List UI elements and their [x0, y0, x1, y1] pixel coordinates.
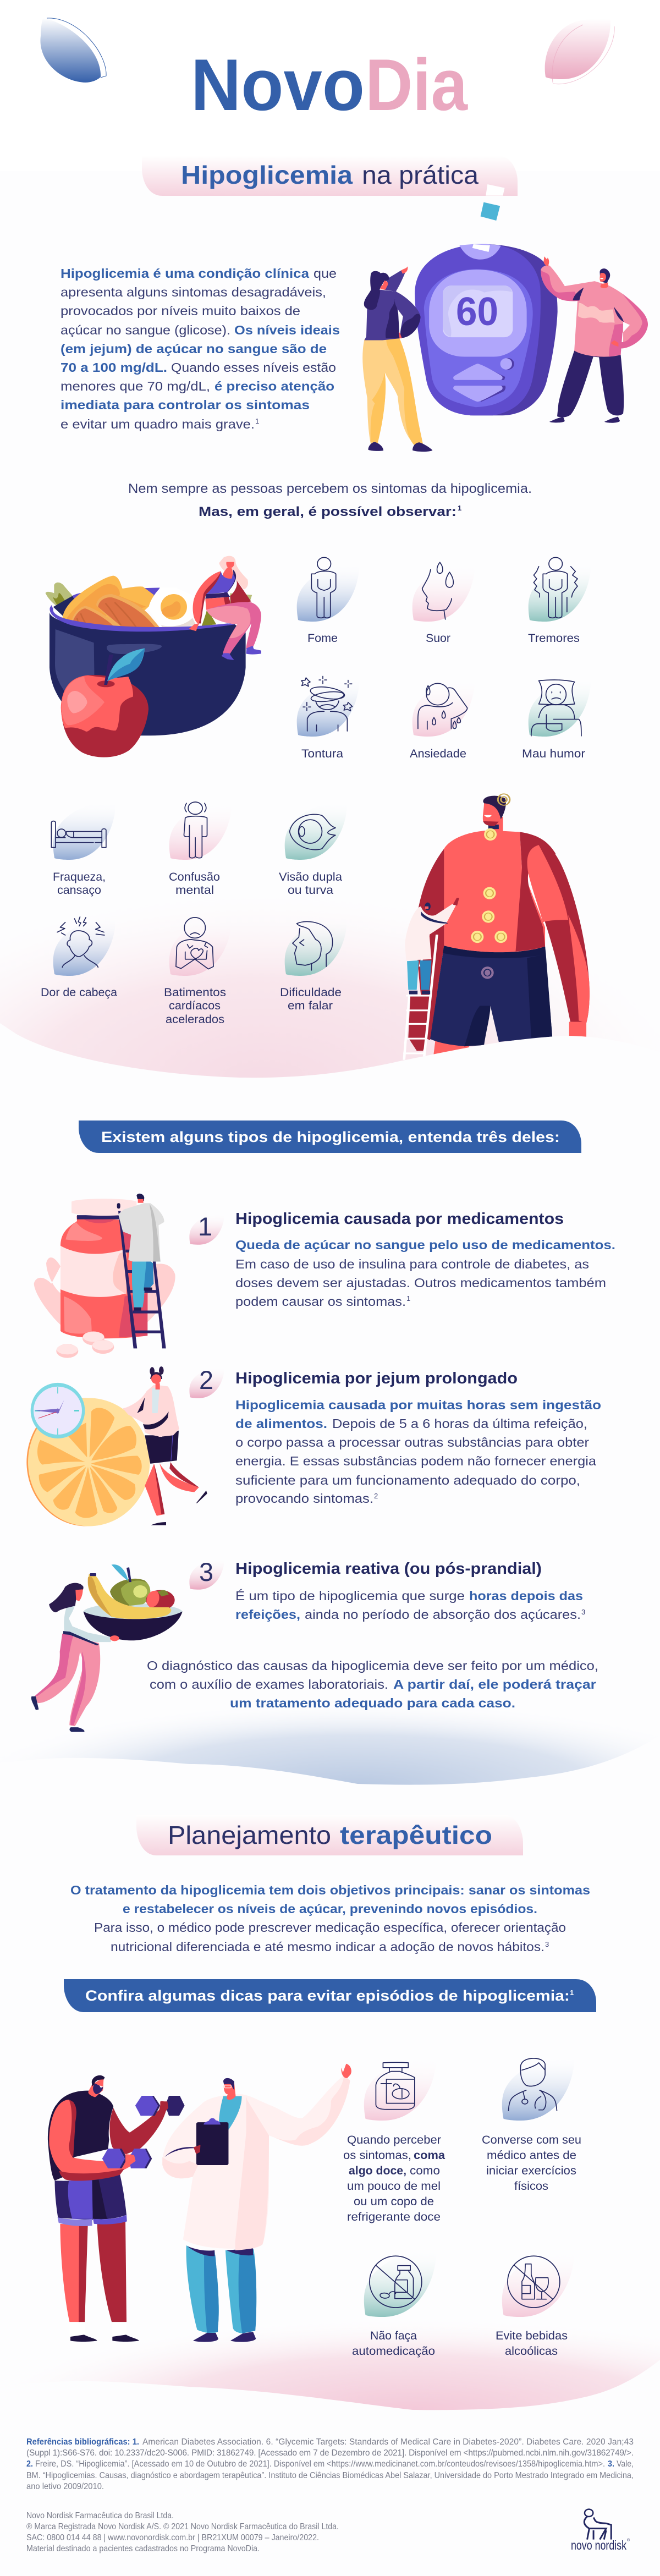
number badge 2: 2: [199, 1365, 213, 1394]
references: BM. “Hipoglicemias. Causas, diagnóstico e abordagem terapêutica”. Instituto de Ciências Biomédicas Abel Salazar, Universidade do Porto Mestrado Integrado em Medicina,: [26, 2471, 634, 2480]
symptom: Tremores: [528, 557, 591, 645]
tip: converse com seu médico: iniciar exercícios: [486, 2165, 576, 2177]
man: [541, 256, 648, 423]
section banner: tipos de hipoglicemia: [79, 1121, 581, 1153]
diagnosis note: O diagnóstico das causas da hipoglicemia deve ser feito por um médico,: [147, 1658, 598, 1673]
references: (Suppl 1):S66-S76. doi: 10.2337/dc20-S006. PMID: 31862749. [Acessado em 7 de Dezembro de 2021]. Disponível em <https://pubmed.ncbi.nlm.nih.gov/31862749/>.: [26, 2448, 634, 2458]
symptom: Batimentos cardíacos acelerados: Batimentos: [164, 986, 226, 999]
symptom: Dificuldade em falar: Dificuldade: [280, 986, 342, 999]
intro paragraph: açúcar no sangue (glicose).: [61, 323, 230, 337]
cause 2: jejum prolongado: o corpo passa a processar outras substâncias para obter: [235, 1435, 589, 1449]
treatment text: O tratamento da hipoglicemia tem dois objetivos principais: sanar os sintomas: [70, 1883, 590, 1897]
trainer torso and arms: [48, 2091, 168, 2181]
legal footer: Novo Nordisk Farmacêutica do Brasil Ltda.: [26, 2511, 174, 2520]
symptom: Fome: Fome: [307, 632, 338, 645]
symptom: Fraqueza, cansaço: Fraqueza,: [53, 871, 106, 883]
cause 3: reativa: [235, 1560, 585, 1622]
heading banner: Planejamento terapêutico: terapêutico: [340, 1821, 492, 1849]
legal footer: ® Marca Registrada Novo Nordisk A/S. © 2021 Novo Nordisk Farmacêutica do Brasil Ltda.: [26, 2522, 339, 2531]
illustration: food bowl, apple and woman: [46, 556, 261, 757]
cause 1: medicamentos: 1: [406, 1294, 410, 1303]
panel: symptom icon row 2: [297, 676, 591, 760]
ladder: [403, 935, 438, 1060]
cause 2: jejum prolongado: energia. E essas substâncias podem não fornecer energia: [235, 1454, 597, 1468]
treatment text: Para isso, o médico pode prescrever medicação específica, oferecer orientação: [94, 1920, 566, 1935]
head: [483, 796, 506, 832]
logo: Novo Nordisk: novo nordisk: [571, 2538, 626, 2552]
shorts: [430, 946, 552, 1046]
meter body: [415, 244, 558, 415]
treatment text: 3: [545, 1940, 549, 1948]
section banner: dicas: [64, 1979, 596, 2012]
greens: [46, 583, 252, 626]
references: American Diabetes Association. 6. “Glycemic Targets: Standards of Medical Care in Diabetes-2020”. Diabetes Care. 2020 Jan;43: [142, 2437, 634, 2447]
symptom: Ansiedade: Ansiedade: [410, 748, 466, 760]
symptom: Tremores: Tremores: [528, 632, 580, 645]
intro paragraph: Hipoglicemia é uma condição clínica: [61, 266, 310, 281]
doctor head and hand: [223, 2064, 351, 2100]
references: [26, 2437, 634, 2491]
intro paragraph: Quando esses níveis estão: [171, 360, 336, 375]
cause 1: medicamentos: [235, 1210, 615, 1309]
references: 3.: [608, 2459, 614, 2469]
diagnosis note: um tratamento adequado para cada caso.: [230, 1696, 515, 1710]
cause 1: medicamentos: doses devem ser ajustadas. Outros medicamentos também: [235, 1276, 606, 1290]
intro paragraph: é preciso atenção: [215, 379, 334, 393]
heading banner: Planejamento terapêutico: [136, 1815, 523, 1855]
intro paragraph: 1: [255, 417, 259, 425]
apple: [61, 648, 148, 757]
references: Vale,: [617, 2459, 634, 2469]
clipboard: [164, 2118, 228, 2165]
symptoms intro text: Mas, em geral, é possível observar:: [199, 504, 457, 519]
background wave: pink bottom: [0, 2319, 660, 2410]
symptom: Mau humor: [522, 678, 591, 760]
symptom: Mau humor: Mau humor: [522, 748, 585, 760]
illustration: glucose meter with two people: [362, 184, 648, 452]
doctor: [117, 1194, 164, 1310]
diagnosis note: A partir daí, ele poderá traçar: [393, 1677, 596, 1691]
orange slice: [26, 1398, 150, 1526]
intro paragraph: (em jejum) de açúcar no sangue são de: [61, 342, 327, 356]
illustration: orange slice, clock and woman: [26, 1366, 207, 1526]
dumbbell lower: [102, 2149, 152, 2168]
right arm: [527, 841, 590, 1039]
intro paragraph: e evitar um quadro mais grave.: [61, 417, 255, 431]
symptom: Tontura: Tontura: [301, 748, 343, 760]
references: ano letivo 2009/2010.: [26, 2482, 104, 2491]
test strip: [481, 184, 504, 221]
symptom: Batimentos cardíacos acelerados: [164, 917, 232, 1026]
seated woman: [189, 556, 261, 660]
section banner: tipos de hipoglicemia: Existem alguns tipos de hipoglicemia, entenda três deles:: [101, 1129, 560, 1145]
cause 2: jejum prolongado: [235, 1370, 601, 1506]
tip: coma algo doce: um pouco de mel: [347, 2180, 441, 2193]
symptom: Suor: [413, 562, 475, 645]
symptom: Dificuldade em falar: em falar: [288, 999, 333, 1012]
treatment text: nutricional diferenciada e até mesmo indicar a adoção de novos hábitos.: [111, 1940, 544, 1954]
cause 3: reativa: ainda no período de absorção dos açúcares.: [305, 1607, 581, 1622]
meter reading: 60: [456, 290, 498, 334]
tip: coma algo doce: os sintomas,: [343, 2149, 411, 2162]
section banner: dicas: 1: [570, 1989, 574, 1997]
tip: evite bebidas alcoólicas: Evite bebidas: [496, 2330, 568, 2342]
illustration: medicine bottle with doctor on ladder: [34, 1194, 175, 1358]
references: 2.: [26, 2459, 33, 2469]
doctor pants: [186, 2245, 256, 2342]
symptom: Batimentos cardíacos acelerados: cardíacos: [169, 999, 221, 1012]
tip: coma algo doce: algo doce,: [349, 2165, 406, 2177]
panel: symptom icon row 1: [297, 557, 591, 645]
tip: evite bebidas alcoólicas: alcoólicas: [505, 2345, 558, 2358]
tip: não faça automedicação: [352, 2249, 436, 2358]
clock: [31, 1383, 85, 1438]
tip: coma algo doce: como: [410, 2165, 440, 2177]
background wave: blue: [0, 1700, 660, 1785]
number badge 1: 1: [198, 1212, 212, 1241]
symptoms intro text: 1: [458, 504, 461, 512]
illustration: trainer with dumbbells and doctor: [48, 2064, 351, 2342]
tip: coma algo doce: refrigerante doce: [347, 2211, 441, 2223]
left arm and legs: [408, 849, 469, 1055]
treatment text: e restabelecer os níveis de açúcar, prevenindo novos episódios.: [123, 1902, 537, 1916]
references: Freire, DS. “Hipoglicemia”. [Acessado em 10 de Outubro de 2021]. Disponível em <https://www.medicinanet.com.br/conteudos/revisoes/1358/hipoglicemia.htm>.: [35, 2459, 605, 2469]
ladder: [118, 1211, 166, 1348]
illustration: woman carrying bowl of fruit: [31, 1564, 183, 1732]
background wave: pink: [0, 891, 660, 1078]
symptom: Batimentos cardíacos acelerados: acelerados: [166, 1013, 224, 1026]
logo: Novo Nordisk: ®: [627, 2538, 630, 2542]
symptom: Fraqueza, cansaço: cansaço: [57, 884, 101, 897]
tip: converse com seu médico: físicos: [514, 2180, 548, 2193]
section banner: dicas: Confira algumas dicas para evitar episódios de hipoglicemia:: [85, 1987, 570, 2004]
cause 2: jejum prolongado: de alimentos.: [235, 1416, 327, 1431]
tip: não faça automedicação: automedicação: [352, 2345, 435, 2358]
legal footer: Material destinado a pacientes cadastrados no Programa NovoDia.: [26, 2544, 260, 2553]
title: NovoDia logo: Novo: [191, 45, 365, 126]
cause 3: reativa: refeições,: [235, 1607, 300, 1622]
number badge 2: [189, 1365, 224, 1398]
decorative leaf: top right: [545, 19, 614, 84]
symptom: Visão dupla ou turva: ou turva: [288, 884, 333, 897]
cause 2: jejum prolongado: Hipoglicemia causada por muitas horas sem ingestão: [235, 1398, 601, 1412]
torso and head: [49, 1583, 119, 1645]
cause 2: jejum prolongado: Hipoglicemia por jejum prolongado: [235, 1370, 518, 1387]
cause 2: jejum prolongado: suficiente para um funcionamento adequado do corpo,: [235, 1473, 580, 1487]
tip: não faça automedicação: Não faça: [370, 2330, 417, 2342]
cause 3: reativa: 3: [581, 1608, 585, 1616]
trainer head: [89, 2075, 105, 2097]
number badge 1: [189, 1212, 224, 1245]
symptom: Suor: Suor: [426, 632, 450, 645]
cause 2: jejum prolongado: 2: [374, 1492, 378, 1500]
panel: symptom icon row 3: [51, 801, 347, 897]
symptom: Tontura: [297, 676, 359, 760]
illustration: giant man with doctor on a ladder: [403, 794, 590, 1060]
legal footer: SAC: 0800 014 44 88 | www.novonordisk.com.br | BR21XUM 00079 – Janeiro/2022.: [26, 2533, 319, 2542]
small doctor: [405, 898, 459, 995]
tip: coma algo doce: [343, 2056, 445, 2223]
symptom: Fraqueza, cansaço: [51, 801, 116, 897]
intro paragraph: que: [314, 266, 337, 281]
symptom: Confusão mental: Confusão: [169, 871, 220, 883]
tip: converse com seu médico: Converse com seu: [482, 2134, 581, 2146]
doctor coat: [162, 2075, 350, 2250]
woman pushing: [123, 1366, 207, 1525]
hand leaves: [34, 1257, 175, 1325]
panel: symptom icon row 4: [41, 917, 347, 1026]
title: NovoDia logo: [191, 45, 468, 126]
bottle: [61, 1199, 147, 1338]
trainer legs and shorts: [55, 2174, 139, 2342]
decorative leaf: top left: [40, 18, 106, 83]
references: Referências bibliográficas: 1.: [26, 2437, 139, 2447]
legal footer: [26, 2511, 339, 2553]
symptom: Confusão mental: mental: [175, 884, 214, 897]
pain point markers: [471, 794, 510, 979]
tip: evite bebidas alcoólicas: [496, 2249, 574, 2358]
number badge 3: [189, 1557, 224, 1590]
diagnosis note: com o auxílio de exames laboratoriais.: [150, 1677, 388, 1691]
intro paragraph: Os níveis ideais: [234, 323, 340, 337]
tip: converse com seu médico: [482, 2056, 581, 2193]
dumbbell upper: [135, 2096, 185, 2116]
diagnosis note: [147, 1658, 598, 1710]
cause 1: medicamentos: Hipoglicemia causada por medicamentos: [235, 1210, 564, 1228]
tip: converse com seu médico: médico antes de: [487, 2149, 576, 2162]
panel: tips: [343, 2056, 581, 2358]
symptoms intro text: [128, 481, 532, 519]
cause 2: jejum prolongado: Depois de 5 a 6 horas da última refeição,: [332, 1416, 587, 1431]
logo: Novo Nordisk: [571, 2509, 630, 2552]
symptom: Visão dupla ou turva: [279, 801, 347, 897]
symptom: Dor de cabeça: [41, 917, 117, 999]
cause 3: reativa: horas depois das: [469, 1589, 583, 1603]
number badge 3: 3: [199, 1557, 213, 1586]
bowl contents: [53, 576, 196, 630]
symptom: Visão dupla ou turva: Visão dupla: [279, 871, 342, 883]
cause 3: reativa: É um tipo de hipoglicemia que surge: [235, 1589, 465, 1603]
intro paragraph: 70 a 100 mg/dL.: [61, 360, 167, 375]
title: NovoDia logo: Dia: [365, 45, 468, 126]
heading banner: Hipoglicemia na prática: Hipoglicemia: [181, 161, 353, 189]
symptom: Dificuldade em falar: [280, 917, 347, 1012]
legs: [31, 1634, 100, 1732]
symptom: Dor de cabeça: Dor de cabeça: [41, 986, 117, 999]
woman: [362, 266, 432, 452]
torso: [444, 830, 556, 952]
symptoms intro text: Nem sempre as pessoas percebem os sintomas da hipoglicemia.: [128, 481, 532, 496]
heading banner: Hipoglicemia na prática: [142, 156, 518, 196]
pills: [56, 1331, 114, 1358]
heading banner: Hipoglicemia na prática: na prática: [362, 161, 479, 189]
intro paragraph: [61, 266, 340, 431]
cause 3: reativa: Hipoglicemia reativa (ou pós-prandial): [235, 1560, 542, 1578]
intro paragraph: provocados por níveis muito baixos de: [61, 304, 300, 318]
bowl: [50, 605, 246, 735]
cause 1: medicamentos: Queda de açúcar no sangue pelo uso de medicamentos.: [235, 1238, 615, 1252]
intro paragraph: imediata para controlar os sintomas: [61, 398, 310, 412]
tip: coma algo doce: coma: [414, 2149, 445, 2162]
intro paragraph: menores que 70 mg/dL,: [61, 379, 210, 393]
symptom: Ansiedade: [410, 678, 475, 760]
cause 1: medicamentos: Em caso de uso de insulina para controle de diabetes, as: [235, 1257, 589, 1271]
cause 2: jejum prolongado: provocando sintomas.: [235, 1491, 373, 1506]
bowl with fruit: [84, 1564, 183, 1640]
treatment text: [70, 1883, 590, 1954]
symptom: Fome: [297, 557, 359, 645]
tip: coma algo doce: ou um copo de: [354, 2195, 434, 2208]
intro paragraph: apresenta alguns sintomas desagradáveis,: [61, 285, 326, 299]
heading banner: Planejamento terapêutico: Planejamento: [168, 1821, 331, 1849]
symptom: Confusão mental: [169, 801, 232, 897]
tip: coma algo doce: Quando perceber: [347, 2134, 441, 2146]
cause 1: medicamentos: podem causar os sintomas.: [235, 1294, 406, 1309]
